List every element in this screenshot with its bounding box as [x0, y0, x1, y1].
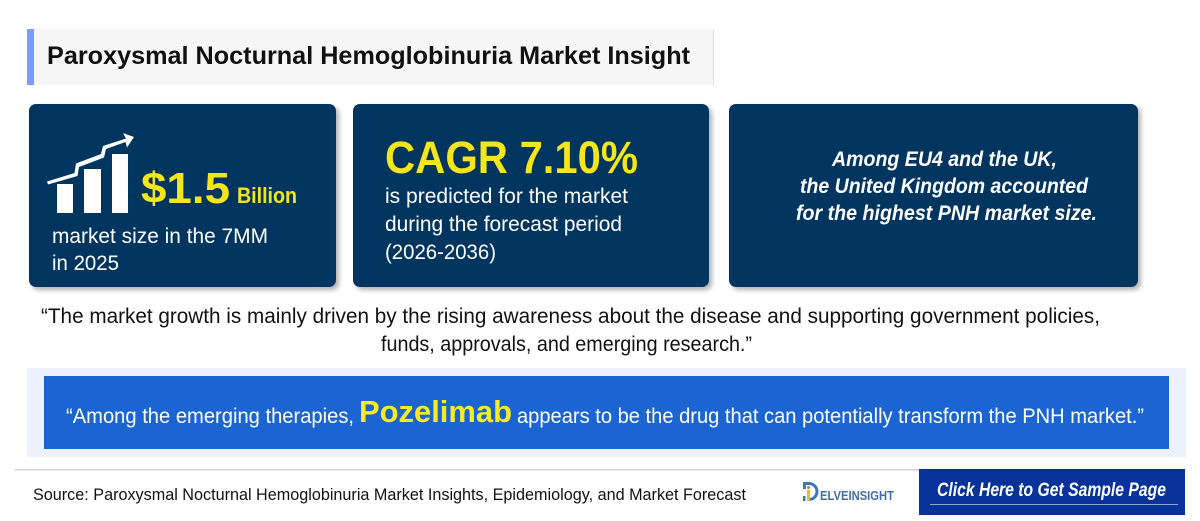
text: EU4 statement — [796, 148, 1097, 225]
logo: DelveInsight — [803, 482, 894, 503]
quote: market growth — [41, 305, 1100, 356]
quote: market growth: “The market growth is mainly driven by the rising awareness about the disease and supporting government policies, — [41, 305, 1100, 328]
heading: Paroxysmal Nocturnal Hemoglobinuria Market Insight — [47, 42, 691, 70]
title banner — [27, 29, 714, 85]
text: EU4 statement: for the highest PNH market size. — [796, 202, 1097, 225]
logo: DelveInsight: ELVEINSIGHT — [820, 489, 894, 503]
text: market size description: market size in the 7MM — [52, 225, 268, 248]
callout text — [66, 394, 1144, 429]
value: $1.5 Billion: $1.5 — [141, 164, 230, 213]
button: sample page — [919, 469, 1185, 515]
value: CAGR 7.10%: CAGR 7.10% — [385, 132, 638, 183]
panel: CAGR — [353, 104, 709, 287]
text: market size description — [52, 225, 268, 275]
callout text: “Among the emerging therapies, — [66, 405, 354, 428]
panel: EU4 and UK — [729, 104, 1138, 287]
callout text: appears to be the drug that can potentially transform the PNH market.” — [517, 405, 1144, 428]
text: EU4 statement: the United Kingdom accounted — [800, 175, 1089, 198]
quote: market growth: funds, approvals, and emerging research.” — [381, 333, 752, 356]
text: CAGR description: (2026-2036) — [385, 241, 496, 264]
text: CAGR description — [385, 185, 628, 264]
text: market size description: in 2025 — [52, 252, 119, 275]
text: CAGR description: is predicted for the market — [385, 185, 628, 208]
callout text: Pozelimab — [359, 394, 512, 429]
value: $1.5 Billion — [141, 164, 297, 213]
panel: emerging therapy callout — [27, 368, 1186, 457]
panel: market size — [29, 104, 336, 287]
text: EU4 statement: Among EU4 and the UK, — [831, 148, 1057, 171]
text: CAGR description: during the forecast period — [385, 213, 622, 236]
icon: rising bar chart with arrow — [47, 133, 134, 213]
value: $1.5 Billion: Billion — [237, 183, 297, 208]
source text: Source: Paroxysmal Nocturnal Hemoglobinuria Market Insights, Epidemiology, and Market Forecast — [33, 485, 746, 504]
